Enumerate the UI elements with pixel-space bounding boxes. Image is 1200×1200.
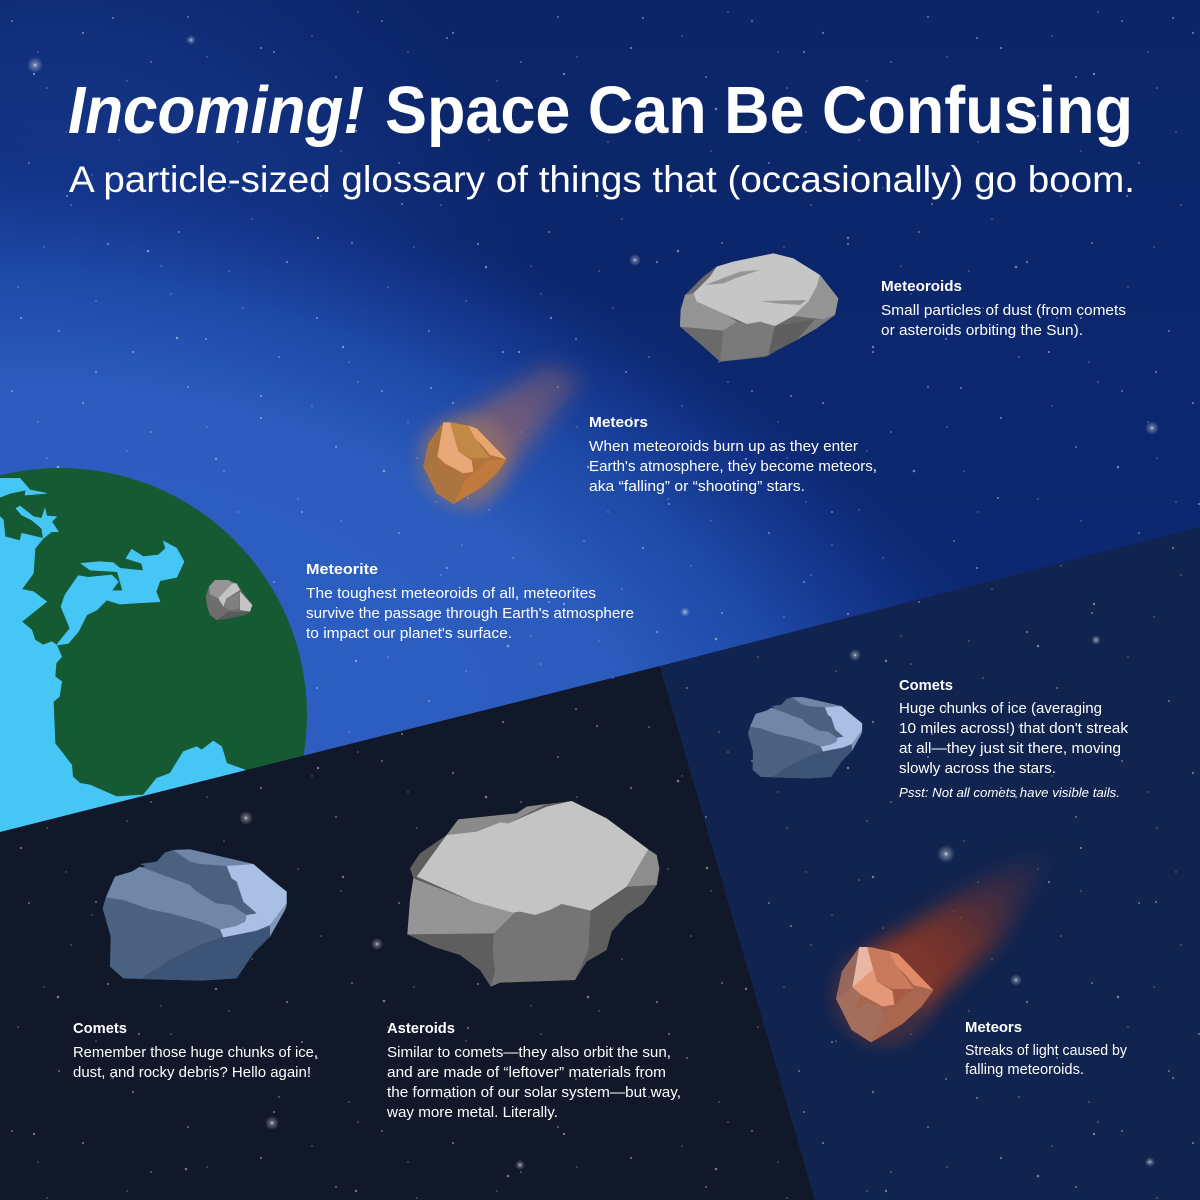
text: meteorite: Meteorite bbox=[306, 561, 378, 578]
panel: navy lower right bbox=[660, 527, 1200, 1200]
text: comets left: dust, and rocky debris? Hello again! bbox=[73, 1064, 311, 1081]
text: meteors lower: falling meteoroids. bbox=[965, 1061, 1084, 1078]
text: comets right bbox=[899, 677, 1129, 800]
title bbox=[68, 73, 1133, 148]
icon: asteroid rock bbox=[407, 801, 659, 987]
text: comets left bbox=[73, 1020, 318, 1081]
title: Incoming! bbox=[68, 73, 364, 148]
text: comets right: Huge chunks of ice (averaging bbox=[899, 700, 1102, 717]
text: meteoroids bbox=[881, 278, 1126, 339]
text: meteorite: The toughest meteoroids of all, meteorites bbox=[306, 585, 596, 602]
text: meteors upper bbox=[589, 414, 877, 495]
panel: earth bbox=[0, 468, 307, 832]
icon: red meteor with tail bbox=[832, 848, 1054, 1047]
text: asteroids: Similar to comets—they also orbit the sun, bbox=[387, 1044, 671, 1061]
text: asteroids: and are made of “leftover” materials from bbox=[387, 1064, 666, 1081]
text: meteors lower bbox=[965, 1019, 1127, 1078]
icon: orange meteor with tail bbox=[416, 362, 585, 512]
text: meteorite: to impact our planet's surface. bbox=[306, 625, 512, 642]
text: meteors upper: Meteors bbox=[589, 414, 648, 431]
text: meteors lower: Meteors bbox=[965, 1019, 1022, 1036]
icon: meteoroid rock bbox=[680, 253, 838, 362]
text: asteroids: Asteroids bbox=[387, 1020, 455, 1037]
text: comets right: at all—they just sit there, moving bbox=[899, 740, 1121, 757]
title: Space Can Be Confusing bbox=[385, 73, 1133, 148]
icon: large comet rock bbox=[103, 849, 287, 981]
text: meteors upper: Earth's atmosphere, they become meteors, bbox=[589, 458, 877, 475]
icon: small comet rock bbox=[748, 697, 862, 778]
subtitle: A particle-sized glossary of things that (occasionally) go boom. bbox=[69, 159, 1135, 200]
text: meteorite bbox=[306, 561, 634, 642]
text: comets right: slowly across the stars. bbox=[899, 760, 1056, 777]
text: meteors upper: aka “falling” or “shooting” stars. bbox=[589, 478, 805, 495]
text: comets right: Psst: Not all comets have visible tails. bbox=[899, 786, 1120, 800]
text: comets left: Comets bbox=[73, 1020, 127, 1037]
icon: meteorite rock on earth bbox=[206, 580, 252, 620]
text: meteoroids: Small particles of dust (from comets bbox=[881, 302, 1126, 319]
text: comets left: Remember those huge chunks of ice, bbox=[73, 1044, 318, 1061]
text: meteorite: survive the passage through Earth's atmosphere bbox=[306, 605, 634, 622]
text: meteors upper: When meteoroids burn up as they enter bbox=[589, 438, 858, 455]
text: asteroids bbox=[386, 1020, 681, 1121]
text: comets right: Comets bbox=[899, 677, 953, 694]
text: asteroids: way more metal. Literally. bbox=[386, 1104, 558, 1121]
text: meteors lower: Streaks of light caused by bbox=[965, 1042, 1127, 1059]
panel: dark lower left bbox=[0, 666, 815, 1200]
text: meteoroids: Meteoroids bbox=[881, 278, 962, 295]
text: asteroids: the formation of our solar system—but way, bbox=[387, 1084, 681, 1101]
text: comets right: 10 miles across!) that don't streak bbox=[899, 720, 1129, 737]
text: meteoroids: or asteroids orbiting the Sun). bbox=[881, 322, 1083, 339]
